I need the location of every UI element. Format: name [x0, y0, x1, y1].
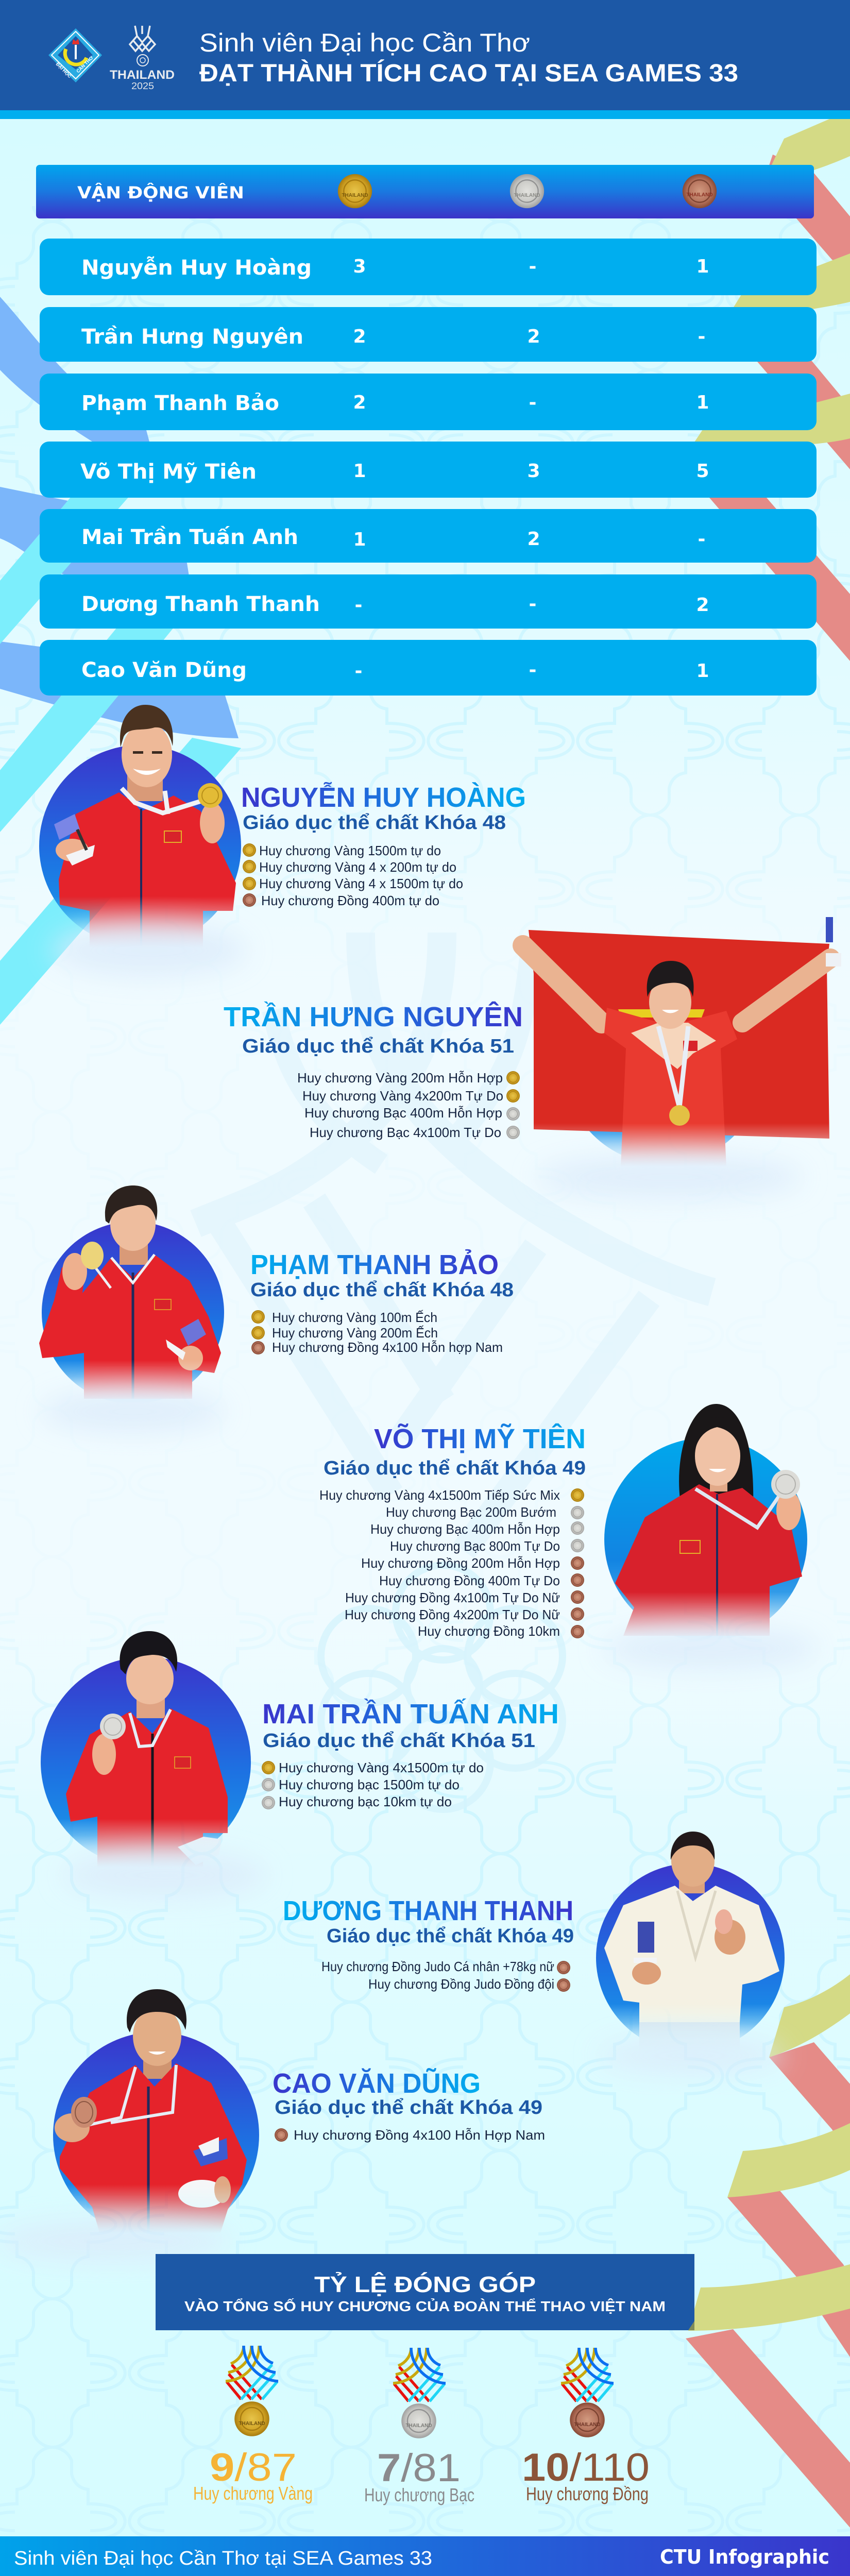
medal list: Huy chương bạc 10km tự do	[279, 1794, 452, 1809]
stat: gold	[193, 2346, 313, 2504]
medal list: Huy chương Bạc 200m Bướm	[386, 1504, 556, 1520]
icon: ribbon and silver medal	[393, 2348, 446, 2438]
athlete panel: Cao Văn Dũng	[0, 1989, 545, 2262]
row: Dương Thanh Thanh: Dương Thanh Thanh	[81, 592, 320, 616]
name: CAO VĂN DŨNG	[273, 2068, 481, 2099]
icon: ribbon and gold medal: THAILAND	[239, 2421, 265, 2427]
medal list: Huy chương Vàng 4x200m Tự Do	[302, 1088, 503, 1104]
name: VÕ THỊ MỸ TIÊN	[374, 1423, 586, 1454]
icon: ribbon and silver medal: THAILAND	[405, 2423, 432, 2429]
row: Trần Hưng Nguyên: 2	[527, 326, 540, 347]
medal list: Huy chương Đồng 400m tự do	[261, 893, 439, 908]
medal list: Huy chương Đồng Judo Cá nhân +78kg nữ	[321, 1959, 554, 1974]
faculty: Giáo dục thể chất Khóa 51	[263, 1730, 535, 1752]
label: Huy chương Đồng	[526, 2483, 649, 2504]
icon: silver medal	[510, 174, 544, 208]
medal list: Huy chương Bạc 400m Hỗn Hợp	[370, 1521, 560, 1537]
row: Mai Trần Tuấn Anh: -	[698, 529, 705, 550]
icon: gold medal: THAILAND	[342, 193, 368, 198]
row: Võ Thị Mỹ Tiên: 5	[696, 461, 709, 482]
name: TRẦN HƯNG NGUYÊN	[224, 1001, 523, 1032]
row: Dương Thanh Thanh: -	[355, 595, 362, 616]
portrait	[596, 1832, 785, 2074]
row: Mai Trần Tuấn Anh	[40, 509, 817, 563]
name: NGUYỄN HUY HOÀNG	[241, 782, 526, 813]
row: Cao Văn Dũng	[40, 640, 817, 696]
logo: SEA Games Thailand 2025: THAILAND	[110, 68, 175, 82]
row: Nguyễn Huy Hoàng: Nguyễn Huy Hoàng	[81, 256, 312, 280]
portrait	[603, 1404, 819, 1669]
row: Phạm Thanh Bảo: 1	[696, 392, 709, 413]
medal list: Huy chương Đồng 4x100 Hỗn hợp Nam	[272, 1340, 503, 1355]
row: Cao Văn Dũng: Cao Văn Dũng	[81, 658, 247, 682]
logo: Đại học Cần Thơ: CẦN THƠ	[75, 55, 94, 74]
footer bar: CTU Infographic	[660, 2546, 829, 2568]
medal list	[297, 1070, 520, 1140]
contribution banner: TỶ LỆ ĐÓNG GÓP	[314, 2272, 536, 2297]
row: Võ Thị Mỹ Tiên: Võ Thị Mỹ Tiên	[80, 460, 257, 484]
medal list: Huy chương Đồng 4x200m Tự Do Nữ	[345, 1607, 560, 1622]
row: Võ Thị Mỹ Tiên: 1	[353, 461, 366, 482]
icon: ribbon and bronze medal	[561, 2348, 614, 2437]
name: MAI TRẦN TUẤN ANH	[262, 1699, 559, 1730]
row: Trần Hưng Nguyên: -	[698, 326, 705, 347]
icon: bronze medal: THAILAND	[686, 192, 713, 198]
row: Trần Hưng Nguyên	[40, 307, 817, 362]
row: Dương Thanh Thanh: 2	[696, 595, 709, 616]
icon: ribbon and bronze medal: THAILAND	[574, 2422, 601, 2428]
contribution banner: VÀO TỔNG SỐ HUY CHƯƠNG CỦA ĐOÀN THỂ THAO VIỆT NAM	[184, 2298, 666, 2314]
faculty: Giáo dục thể chất Khóa 48	[250, 1279, 514, 1301]
value: 9/87	[210, 2446, 297, 2489]
background watermark: SEA Games emblem	[196, 933, 712, 1809]
row: Cao Văn Dũng: -	[529, 659, 536, 681]
portrait	[39, 705, 247, 976]
title	[199, 28, 738, 87]
stat: silver	[364, 2348, 474, 2505]
ribbons: blue left	[0, 297, 239, 738]
portrait	[39, 1185, 226, 1432]
medal list: Huy chương Đồng 200m Hỗn Hợp	[361, 1555, 560, 1571]
icon: silver medal: THAILAND	[514, 193, 540, 198]
logo: Đại học Cần Thơ: ĐẠI HỌC	[55, 61, 73, 79]
ribbons: salmon right	[686, 155, 850, 2528]
ribbons: olive right	[688, 119, 850, 2331]
row: Nguyễn Huy Hoàng	[40, 239, 817, 295]
footer bar: Sinh viên Đại học Cần Thơ tại SEA Games 33	[14, 2548, 432, 2569]
athlete panel: Võ Thị Mỹ Tiên	[319, 1404, 819, 1669]
row: Trần Hưng Nguyên: 2	[353, 326, 366, 347]
medal list: Huy chương bạc 1500m tự do	[279, 1777, 460, 1792]
medal list: Huy chương Đồng 4x100 Hỗn Hợp Nam	[294, 2127, 545, 2143]
name: PHẠM THANH BẢO	[250, 1249, 499, 1280]
title: Sinh viên Đại học Cần Thơ	[199, 28, 530, 57]
contribution banner	[156, 2254, 694, 2330]
athlete panel: Trần Hưng Nguyên	[224, 917, 841, 1199]
row: Phạm Thanh Bảo: 2	[353, 392, 366, 413]
row: Mai Trần Tuấn Anh: 2	[527, 529, 540, 550]
medal list: Huy chương Vàng 4 x 1500m tự do	[259, 876, 463, 891]
row: Dương Thanh Thanh: -	[529, 594, 536, 615]
medal list: Huy chương Đồng 4x100m Tự Do Nữ	[345, 1590, 560, 1605]
label: Huy chương Bạc	[364, 2484, 474, 2505]
row: Võ Thị Mỹ Tiên	[40, 442, 817, 498]
logo: SEA Games Thailand 2025: 2025	[131, 81, 154, 91]
portrait with flag	[523, 917, 841, 1199]
medal list: Huy chương Vàng 200m Ếch	[272, 1325, 438, 1341]
logo: Đại học Cần Thơ	[48, 28, 102, 82]
footer bar	[0, 2536, 850, 2576]
ribbons: cyan left	[0, 479, 241, 1025]
medal list: Huy chương Vàng 4x1500m tự do	[279, 1760, 484, 1775]
row: Phạm Thanh Bảo	[40, 374, 817, 430]
stat: bronze	[522, 2348, 650, 2504]
medal list: Huy chương Vàng 4x1500m Tiếp Sức Mix	[319, 1487, 560, 1503]
portrait	[0, 1989, 259, 2262]
faculty: Giáo dục thể chất Khóa 49	[327, 1925, 574, 1947]
row: Nguyễn Huy Hoàng: 3	[353, 256, 366, 277]
value: 7/81	[377, 2446, 461, 2490]
medal list: Huy chương Bạc 800m Tự Do	[390, 1538, 560, 1554]
row: Trần Hưng Nguyên: Trần Hưng Nguyên	[81, 325, 303, 349]
value: 10/110	[522, 2446, 650, 2489]
logo: SEA Games Thailand 2025	[110, 26, 175, 91]
athlete panel: Mai Trần Tuấn Anh	[41, 1631, 559, 1899]
medal list	[319, 1487, 584, 1639]
table header: VẬN ĐỘNG VIÊN	[77, 183, 244, 202]
row: Nguyễn Huy Hoàng: -	[529, 256, 536, 277]
row: Mai Trần Tuấn Anh: 1	[353, 529, 366, 550]
faculty: Giáo dục thể chất Khóa 49	[275, 2097, 542, 2119]
row: Cao Văn Dũng: 1	[696, 660, 709, 682]
medal list: Huy chương Đồng Judo Đồng đội	[368, 1976, 554, 1992]
athlete panel: Phạm Thanh Bảo	[39, 1185, 514, 1432]
name: DƯƠNG THANH THANH	[283, 1895, 573, 1926]
row: Dương Thanh Thanh	[40, 574, 817, 629]
faculty: Giáo dục thể chất Khóa 51	[242, 1036, 514, 1057]
icon: ribbon and gold medal	[226, 2346, 278, 2436]
header bar	[0, 0, 850, 119]
row: Nguyễn Huy Hoàng: 1	[696, 256, 709, 277]
medal list: Huy chương Bạc 400m Hỗn Hợp	[304, 1105, 502, 1121]
medal list	[321, 1959, 570, 1992]
title: ĐẠT THÀNH TÍCH CAO TẠI SEA GAMES 33	[199, 59, 738, 87]
faculty: Giáo dục thể chất Khóa 49	[324, 1458, 586, 1479]
medal list: Huy chương Vàng 1500m tự do	[259, 843, 441, 858]
row: Phạm Thanh Bảo: -	[529, 392, 536, 413]
medal list: Huy chương Bạc 4x100m Tự Do	[310, 1125, 501, 1140]
table header	[36, 165, 814, 218]
medal list: Huy chương Vàng 4 x 200m tự do	[259, 859, 456, 875]
row: Phạm Thanh Bảo: Phạm Thanh Bảo	[81, 392, 279, 415]
medal list	[243, 843, 463, 908]
athlete panel: Nguyễn Huy Hoàng	[39, 705, 526, 976]
row: Võ Thị Mỹ Tiên: 3	[527, 461, 540, 482]
icon: bronze medal	[683, 174, 717, 208]
label: Huy chương Vàng	[193, 2483, 313, 2504]
medal list	[251, 1310, 503, 1355]
icon: gold medal	[338, 174, 372, 208]
medal list	[262, 1760, 484, 1809]
athlete panel: Dương Thanh Thanh	[283, 1832, 785, 2074]
faculty: Giáo dục thể chất Khóa 48	[243, 812, 506, 834]
medal list: Huy chương Vàng 100m Ếch	[272, 1310, 437, 1325]
portrait	[41, 1631, 268, 1899]
row: Cao Văn Dũng: -	[355, 660, 362, 682]
medal table	[36, 165, 817, 696]
row: Mai Trần Tuấn Anh: Mai Trần Tuấn Anh	[81, 526, 298, 549]
medal list: Huy chương Đồng 10km	[418, 1623, 560, 1639]
medal list: Huy chương Đồng 400m Tự Do	[379, 1573, 560, 1588]
medal list: Huy chương Vàng 200m Hỗn Hợp	[297, 1070, 503, 1086]
